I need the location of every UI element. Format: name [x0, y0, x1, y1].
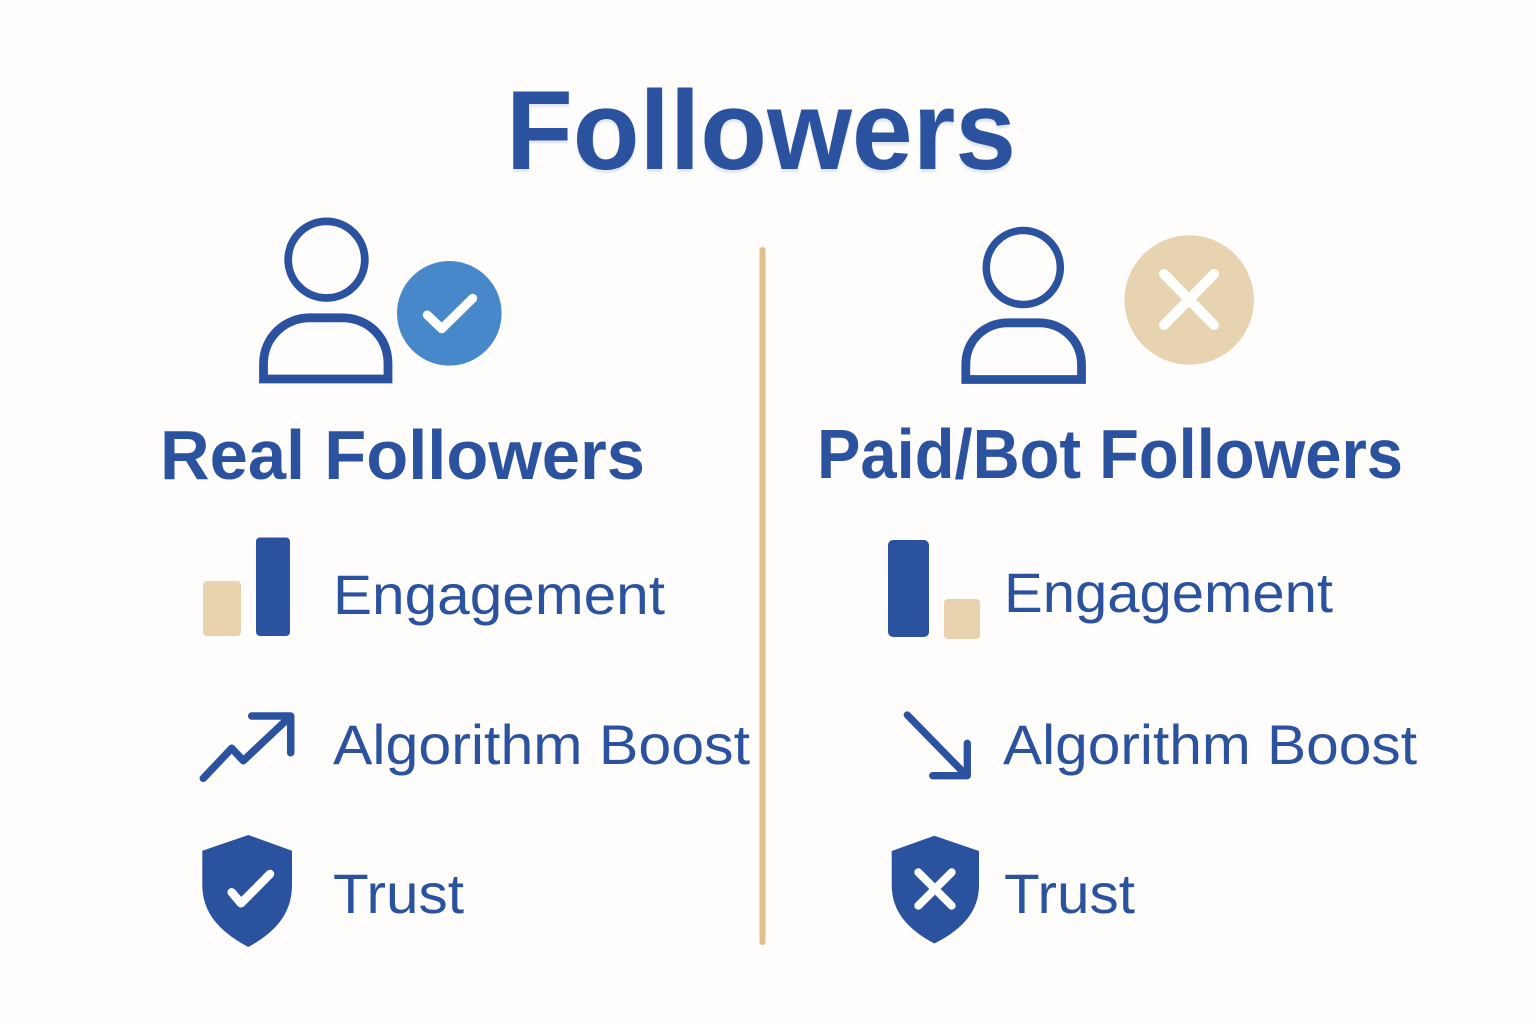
icon: bot user with x badge	[966, 230, 1254, 380]
label: trust: Trust	[333, 862, 464, 925]
title: Followers	[506, 68, 1016, 193]
icon: engagement bars falling	[888, 540, 980, 639]
icon: shield with check	[202, 835, 292, 947]
label: algorithm boost: Algorithm Boost	[333, 713, 750, 776]
icon: arrow trending down	[907, 715, 967, 776]
panel: paid/bot followers	[817, 230, 1417, 944]
icon: real user with check badge	[264, 221, 502, 379]
icon: arrow trending up	[203, 716, 291, 778]
label: algorithm boost: Algorithm Boost	[1003, 713, 1417, 776]
panel: real followers	[160, 221, 750, 947]
heading: paid/bot followers: Paid/Bot Followers	[817, 415, 1403, 493]
icon: engagement bars rising	[203, 538, 290, 636]
icon: shield with x	[892, 836, 979, 944]
label: trust: Trust	[1004, 862, 1135, 925]
divider	[760, 247, 766, 945]
heading: real followers: Real Followers	[160, 416, 645, 494]
label: engagement: Engagement	[333, 563, 665, 626]
label: engagement: Engagement	[1004, 561, 1333, 624]
